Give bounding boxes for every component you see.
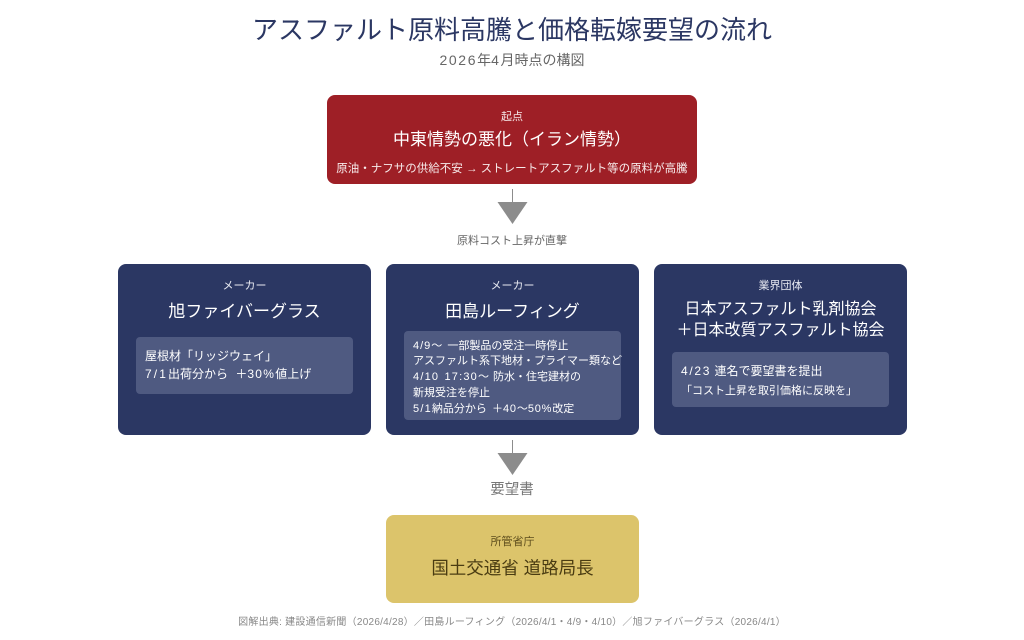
detail lines: 5/1納品分から ＋40〜50%改定	[413, 403, 574, 415]
category label: メーカー	[222, 280, 266, 292]
detail line: 屋根材「リッジウェイ」	[145, 349, 277, 363]
origin description: 原油・ナフサの供給不安 → ストレートアスファルト等の原料が高騰	[336, 163, 688, 175]
arrow: actors to ministry	[498, 440, 528, 475]
ministry label: 所管省庁	[490, 536, 534, 548]
panel: Tajima Roofing	[386, 264, 639, 435]
association names: 日本アスファルト乳剤協会	[684, 301, 876, 318]
detail lines: 新規受注を停止	[413, 387, 490, 399]
detail lines: アスファルト系下地材・プライマー類など	[413, 355, 622, 367]
category label: 業界団体	[758, 280, 802, 292]
detail line: price: 7/1出荷分から ＋30%値上げ	[145, 367, 311, 381]
origin label: 起点	[501, 111, 523, 123]
title: アスファルト原料高騰と価格転嫁要望の流れ	[252, 15, 772, 45]
association names	[676, 300, 884, 339]
detail lines: 4/9〜 一部製品の受注一時停止	[413, 340, 568, 352]
ministry name: 国土交通省 道路局長	[431, 558, 594, 578]
association names: ＋日本改質アスファルト協会	[676, 322, 884, 339]
company name: 田島ルーフィング	[445, 302, 580, 321]
source footnote: 図解出典: 建設通信新聞（2026/4/28）／田島ルーフィング（2026/4/1・4/9・4/10）／旭ファイバーグラス（2026/4/1）	[238, 617, 786, 628]
detail line: 4/23 連名で要望書を提出	[681, 364, 822, 378]
arrow: origin to actors	[498, 189, 528, 224]
detail box	[672, 352, 889, 407]
company name: 旭ファイバーグラス	[168, 302, 321, 321]
arrow label: cost impact: 原料コスト上昇が直撃	[457, 235, 567, 247]
origin heading: 中東情勢の悪化（イラン情勢）	[393, 130, 631, 149]
detail box	[136, 337, 353, 394]
detail box	[404, 331, 621, 420]
panel: industry associations	[654, 264, 907, 435]
arrow label: request: 要望書	[490, 482, 534, 498]
category label: メーカー	[490, 280, 534, 292]
panel: ministry	[386, 515, 639, 603]
detail lines	[413, 340, 622, 415]
subtitle: 2026年4月時点の構図	[440, 52, 584, 68]
panel: origin	[327, 95, 697, 184]
detail lines: 4/10 17:30〜 防水・住宅建材の	[413, 371, 581, 383]
panel: Asahi Fiberglass	[118, 264, 371, 435]
detail line: quote: 「コスト上昇を取引価格に反映を」	[681, 385, 857, 397]
